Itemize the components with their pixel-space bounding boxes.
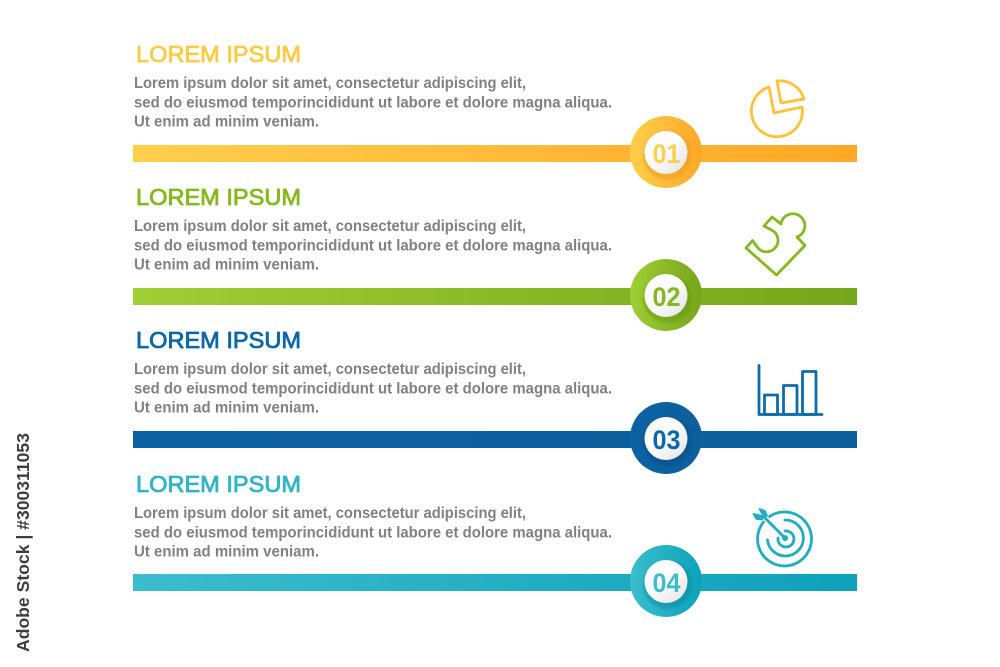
- bar 4: [133, 574, 857, 591]
- icon: bar chart: [759, 366, 822, 414]
- number badge 03: [630, 402, 702, 474]
- number badge 01: 01: [652, 139, 680, 169]
- vertical stock credit: Adobe Stock | #300311053: [13, 433, 33, 652]
- body text 4: [134, 505, 612, 560]
- number badge 04: [630, 545, 702, 617]
- body text 3: Lorem ipsum dolor sit amet, consectetur adipiscing elit,: [134, 361, 526, 378]
- bar 1: [133, 145, 857, 162]
- section 3: [133, 327, 857, 474]
- body text 1: [134, 75, 612, 130]
- number badge 02: 02: [652, 282, 680, 312]
- body text 4: Ut enim ad minim veniam.: [134, 544, 319, 560]
- body text 2: Ut enim ad minim veniam.: [134, 256, 319, 274]
- bar 2: [133, 288, 857, 305]
- icon: puzzle piece: [746, 214, 805, 275]
- bar 3: [133, 431, 857, 448]
- heading 1: LOREM IPSUM: [136, 41, 301, 67]
- body text 1: sed do eiusmod temporincididunt ut labore et dolore magna aliqua.: [134, 94, 612, 112]
- icon: target with arrow: [754, 509, 812, 566]
- icon: pie chart: [751, 81, 804, 137]
- number badge 01: [630, 116, 702, 188]
- body text 1: Ut enim ad minim veniam.: [134, 114, 319, 130]
- number badge 04: 04: [652, 568, 680, 598]
- body text 3: [134, 361, 612, 416]
- body text 3: Ut enim ad minim veniam.: [134, 400, 319, 416]
- body text 2: sed do eiusmod temporincididunt ut labore et dolore magna aliqua.: [134, 238, 612, 254]
- number badge 03: 03: [652, 425, 680, 455]
- body text 1: Lorem ipsum dolor sit amet, consectetur adipiscing elit,: [134, 75, 526, 92]
- body text 2: Lorem ipsum dolor sit amet, consectetur adipiscing elit,: [134, 218, 526, 235]
- body text 4: sed do eiusmod temporincididunt ut labore et dolore magna aliqua.: [134, 524, 612, 542]
- body text 3: sed do eiusmod temporincididunt ut labore et dolore magna aliqua.: [134, 380, 612, 398]
- heading 3: LOREM IPSUM: [136, 327, 301, 353]
- section 4: [133, 471, 857, 617]
- heading 2: LOREM IPSUM: [136, 184, 301, 210]
- heading 4: LOREM IPSUM: [136, 471, 301, 497]
- number badge 02: [630, 259, 702, 331]
- body text 2: [134, 218, 612, 274]
- body text 4: Lorem ipsum dolor sit amet, consectetur adipiscing elit,: [134, 505, 526, 522]
- section 1: [133, 41, 857, 188]
- section 2: [133, 184, 857, 331]
